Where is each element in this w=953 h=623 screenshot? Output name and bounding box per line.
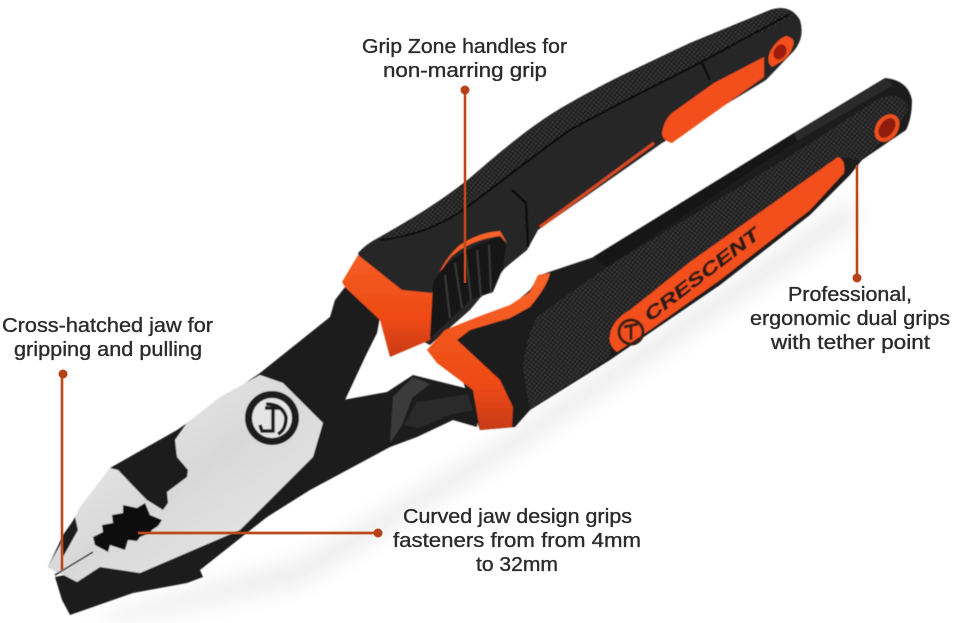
- lower collar orange: [427, 273, 550, 430]
- text: cross-hatched jaw: [2, 315, 213, 361]
- lower handle texture: [523, 96, 908, 410]
- text: grip zone handles: Grip Zone handles for: [362, 36, 567, 58]
- upper arm and head: [48, 287, 380, 582]
- upper handle orange stripe: [540, 143, 654, 227]
- logo on steel plate: [245, 391, 299, 445]
- lower tether orange and hole: [869, 109, 905, 147]
- lower handle orange grip: [610, 157, 844, 352]
- upper grip ribs: [430, 236, 506, 338]
- text: curved jaw design: [393, 506, 641, 576]
- jaw gap line: [55, 552, 93, 575]
- upper handle body: [358, 8, 802, 345]
- text: cross-hatched jaw: gripping and pulling: [14, 339, 202, 361]
- brand name: CRESCENT: [640, 222, 766, 325]
- upper handle joint steps: [512, 63, 710, 247]
- lower handle smooth strips: [593, 133, 797, 267]
- text: cross-hatched jaw: Cross-hatched jaw for: [2, 315, 213, 337]
- text: professional grips: [750, 284, 950, 354]
- text: grip zone handles: non-marring grip: [383, 60, 547, 82]
- callout: dual grips leader: [852, 165, 862, 282]
- soft shadow under pliers: [90, 200, 860, 622]
- polished steel jaw plate: [48, 375, 323, 582]
- text: professional grips: with tether point: [770, 332, 930, 354]
- callout: curved jaw leader: [138, 528, 382, 538]
- callout: cross-hatched jaw leader: [58, 370, 68, 570]
- brand logo mark on grip: [619, 320, 643, 344]
- upper handle orange inlay: [662, 57, 764, 143]
- text: professional grips: ergonomic dual grips: [750, 308, 950, 330]
- text: curved jaw design: Curved jaw design grips: [403, 506, 632, 528]
- dark recess on jaw tip: [62, 517, 78, 557]
- jaw teeth: cross-hatched: [93, 503, 162, 552]
- text: grip zone handles: [362, 36, 567, 82]
- callout: grip zone leader: [460, 86, 470, 283]
- text: professional grips: Professional,: [788, 284, 912, 306]
- upper collar orange: [342, 231, 507, 357]
- text: curved jaw design: to 32mm: [476, 554, 558, 576]
- upper handle ridge: [380, 14, 790, 240]
- lower arm facet: [390, 377, 430, 443]
- grip rib lines: [445, 245, 491, 318]
- lower handle body: [445, 78, 912, 430]
- upper handle texture: [378, 8, 795, 240]
- text: curved jaw design: fasteners from from 4mm: [393, 530, 641, 552]
- lower arm and lower jaw: [55, 375, 479, 615]
- upper tether orange and hole: [768, 36, 794, 67]
